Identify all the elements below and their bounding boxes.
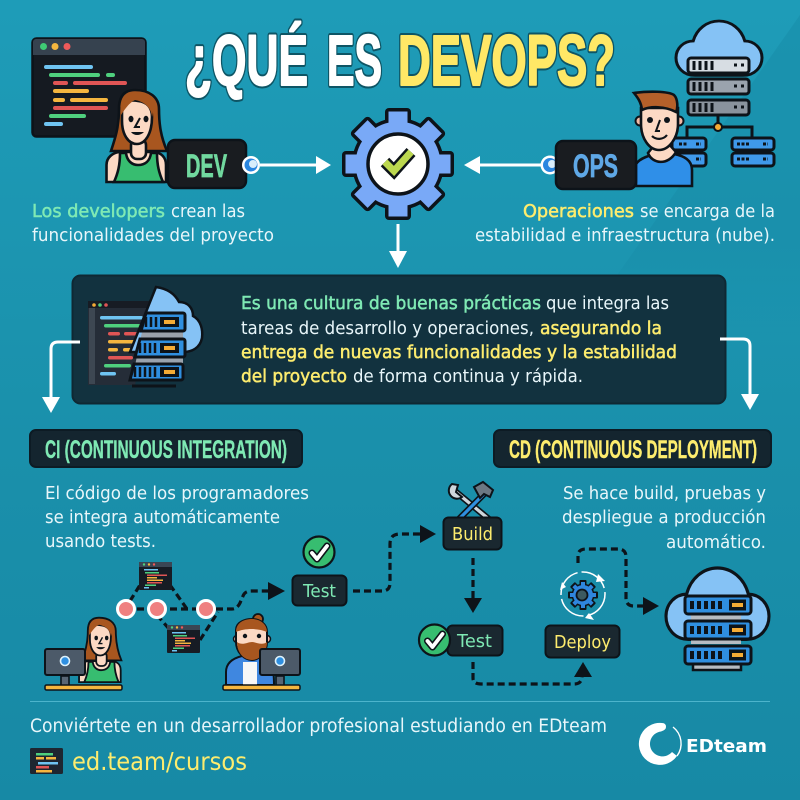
box: Build: Build: [452, 524, 493, 545]
icon: man operator: [634, 92, 692, 186]
title: DEVOPS?: [398, 22, 615, 101]
dashed arrow: build to test: [464, 558, 482, 613]
dashed arrow: merge to test: [216, 582, 285, 609]
icon: code window: [32, 38, 146, 136]
diagram: git branches: [118, 562, 218, 653]
arrow: ops to gear: [464, 156, 560, 174]
panel text: Es una cultura de buenas prácticas: [241, 293, 541, 314]
panel: definition: [72, 276, 726, 404]
arrow: dev to gear: [242, 156, 331, 174]
DEV badge: DEV: [186, 148, 227, 184]
dashed arrow: test to deploy: [473, 662, 592, 684]
icon: tools: [449, 482, 493, 522]
icon: check above test: [304, 536, 334, 568]
text: operaciones: [475, 201, 775, 246]
title: ES: [327, 22, 382, 101]
icon: bearded man at desk: [223, 614, 300, 690]
icon: deploy gear: [560, 572, 605, 620]
panel icon: code and cloud server: [88, 287, 202, 386]
arrow: panel to CD: [720, 339, 759, 410]
box: Deploy: [546, 626, 620, 658]
panel text: asegurando la: [540, 318, 662, 339]
title: ES: [327, 22, 382, 101]
icon: check beside test: [419, 624, 450, 656]
title: ¿QUÉ: [185, 22, 308, 101]
icon: woman at desk: [45, 618, 122, 690]
text: CI description: El código de los programadores: [45, 483, 309, 504]
text: operaciones: se encarga de la: [640, 201, 775, 222]
text: CD description: [562, 483, 766, 553]
code snippet: bottom: [167, 625, 200, 653]
title: DEVOPS?: [398, 22, 615, 101]
icon: cloud server: [666, 568, 769, 670]
dashed arrow: deploy to server: [578, 549, 659, 615]
icon: gear with check: [342, 108, 454, 220]
logo: EDteam: EDteam: [686, 736, 767, 757]
footer: [30, 702, 770, 776]
box: Test CI: Test: [302, 581, 336, 602]
footer text: Conviértete en un desarrollador profesional estudiando en EDteam: [30, 716, 607, 737]
text: CI description: se integra automáticamente: [45, 507, 280, 528]
box: Deploy: Deploy: [554, 632, 611, 653]
title: [185, 22, 615, 101]
box: Build: [444, 518, 502, 550]
text: developers: crean las: [171, 201, 245, 222]
link: ed.team/cursos: [72, 747, 247, 776]
arrow: panel to CI: [42, 342, 80, 413]
panel text: de forma continua y rápida.: [353, 366, 583, 387]
panel text: entrega de nuevas funcionalidades y la estabilidad: [241, 342, 677, 363]
text: CI description: usando tests.: [45, 531, 156, 552]
box: Test CD: [448, 626, 502, 656]
text: developers: Los developers: [32, 201, 165, 222]
panel text: [241, 293, 677, 387]
icon: cloud server network: [672, 21, 774, 166]
heading: CD: [494, 430, 771, 467]
panel text: del proyecto: [241, 366, 347, 387]
dashed arrow: test to build: [353, 525, 436, 591]
text: developers: funcionalidades del proyecto: [32, 225, 274, 246]
OPS badge: OPS: [573, 148, 618, 184]
box: Test CD: Test: [456, 631, 492, 652]
heading: CI: [30, 430, 302, 467]
panel text: tareas de desarrollo y operaciones,: [241, 318, 534, 339]
heading: CI: CI (CONTINUOUS INTEGRATION): [45, 436, 287, 464]
text: operaciones: estabilidad e infraestructura (nube).: [475, 225, 775, 246]
DEV badge: [168, 140, 246, 188]
text: CD description: despliegue a producción: [562, 507, 766, 528]
logo: EDteam: [639, 723, 767, 765]
icon: woman developer: [106, 90, 167, 182]
OPS badge: [556, 141, 636, 189]
text: CD description: Se hace build, pruebas y: [563, 483, 766, 504]
icon: small code window: [30, 748, 63, 774]
title: ¿QUÉ: [185, 22, 308, 101]
text: operaciones: Operaciones: [523, 201, 634, 222]
text: CI description: [45, 483, 309, 552]
code snippet: top: [139, 562, 172, 590]
panel text: que integra las: [546, 293, 669, 314]
text: CD description: automático.: [666, 532, 766, 553]
arrow: gear to panel: [389, 224, 407, 268]
text: developers: [32, 201, 274, 246]
box: Test CI: [292, 576, 346, 606]
